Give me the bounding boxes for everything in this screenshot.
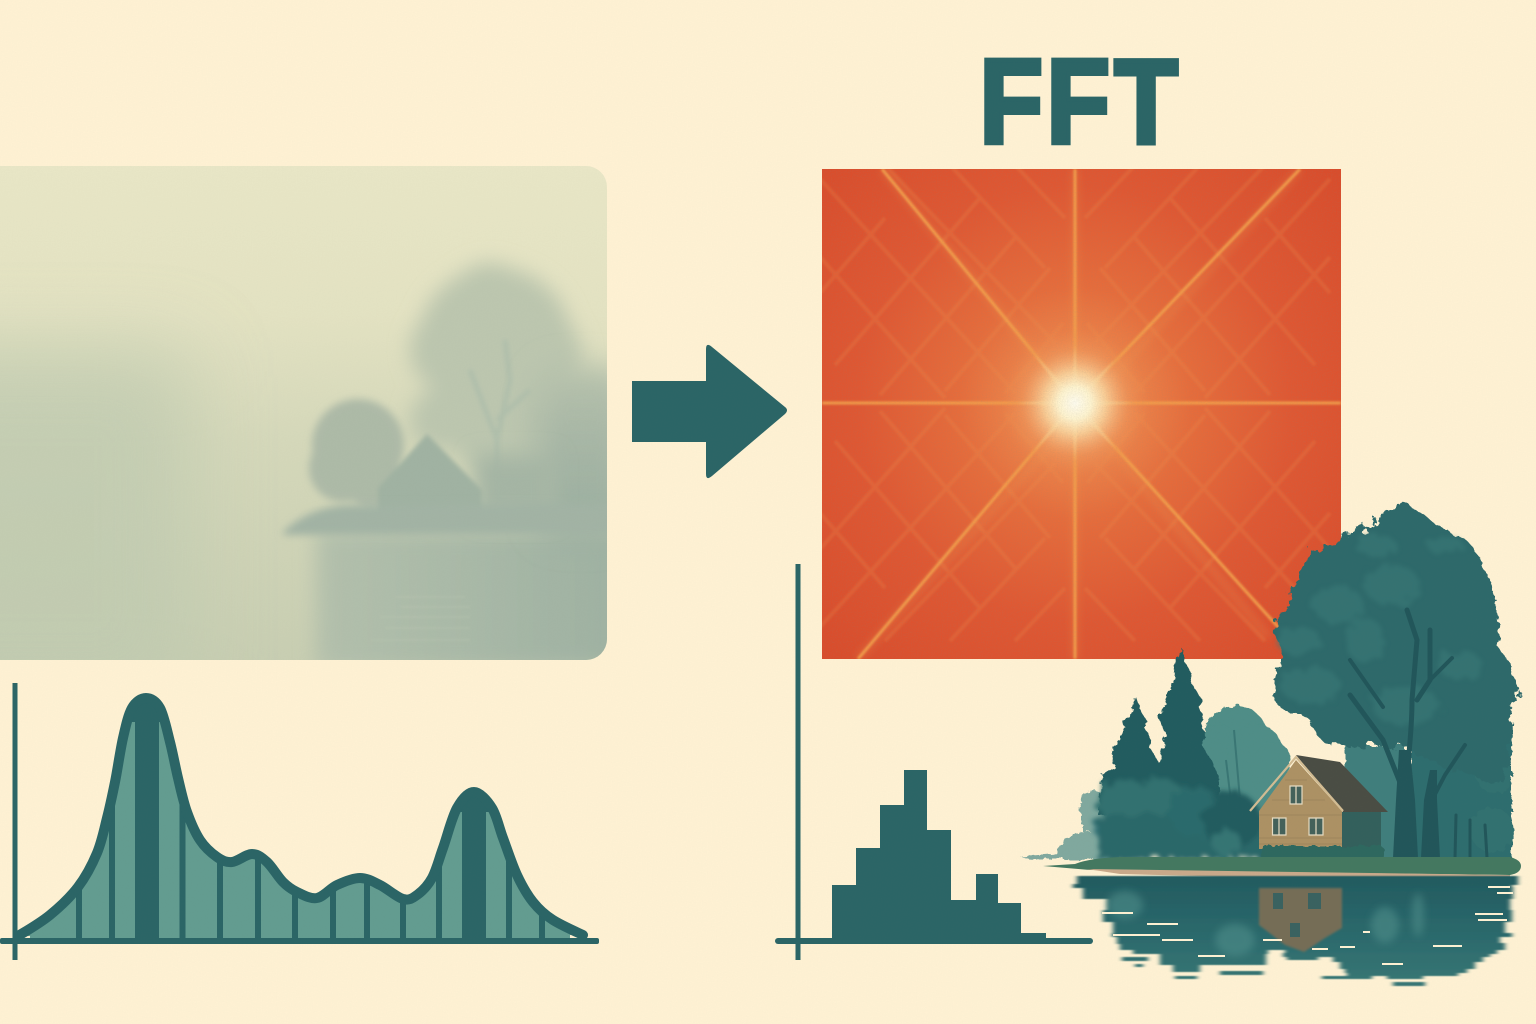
panel noise	[822, 169, 1341, 659]
x axis	[0, 938, 599, 944]
foggy water	[310, 532, 607, 660]
foggy large tree	[410, 263, 582, 475]
curve outline	[18, 698, 583, 936]
histogram bars	[832, 770, 1046, 944]
cream ripple gaps	[1102, 886, 1513, 965]
tree branches	[1350, 610, 1487, 858]
haze: left band	[0, 330, 198, 636]
bright centre	[1020, 348, 1130, 458]
foggy island shore	[282, 502, 549, 538]
water body	[1073, 876, 1518, 986]
sand strip	[1087, 869, 1510, 878]
star spikes	[1022, 351, 1128, 456]
y axis	[12, 683, 18, 960]
mid background tree	[1193, 706, 1291, 820]
foggy photo panel	[0, 166, 607, 660]
histogram-like curve: left chart	[0, 680, 599, 960]
house reflection	[1259, 888, 1342, 952]
main trunks	[1393, 750, 1440, 858]
shrubs	[1260, 846, 1385, 859]
background trunks	[1226, 730, 1240, 810]
lighter water patches	[1107, 891, 1424, 956]
title: FFT	[980, 35, 1178, 169]
vertical bars	[76, 703, 545, 938]
side wall	[1342, 812, 1381, 848]
ray glow	[858, 169, 1300, 659]
y axis	[796, 564, 800, 960]
foggy right mass	[531, 355, 607, 507]
front wall	[1259, 760, 1342, 849]
big tree lower background	[1345, 725, 1514, 860]
spectrum rays	[822, 169, 1341, 659]
lattice lines	[820, 165, 1330, 641]
crown highlights	[1276, 535, 1482, 725]
FFT spectrum panel	[820, 165, 1341, 659]
foggy lower tree base	[468, 452, 544, 507]
fill strip above baseline	[30, 935, 570, 938]
arrow	[632, 345, 787, 478]
reflected windows	[1273, 893, 1321, 937]
gable trim	[1250, 757, 1343, 811]
pines	[1098, 647, 1220, 820]
clear lake scene	[1020, 504, 1521, 986]
foggy trunk	[471, 343, 518, 442]
foggy small tree	[309, 399, 404, 508]
house	[1250, 755, 1388, 859]
foreground bushes	[1094, 778, 1270, 860]
water reflection	[1073, 876, 1518, 986]
foggy water ripples	[370, 596, 470, 641]
windows	[1272, 786, 1323, 835]
x axis	[775, 938, 1093, 944]
roof	[1296, 755, 1388, 812]
histogram: right chart	[775, 564, 1093, 960]
grass bank	[1043, 857, 1521, 875]
brick lines	[1259, 780, 1342, 844]
far hazy trees	[1020, 791, 1118, 859]
big tree crown	[1274, 504, 1516, 785]
foggy house	[378, 434, 482, 515]
curve fill	[18, 698, 583, 936]
